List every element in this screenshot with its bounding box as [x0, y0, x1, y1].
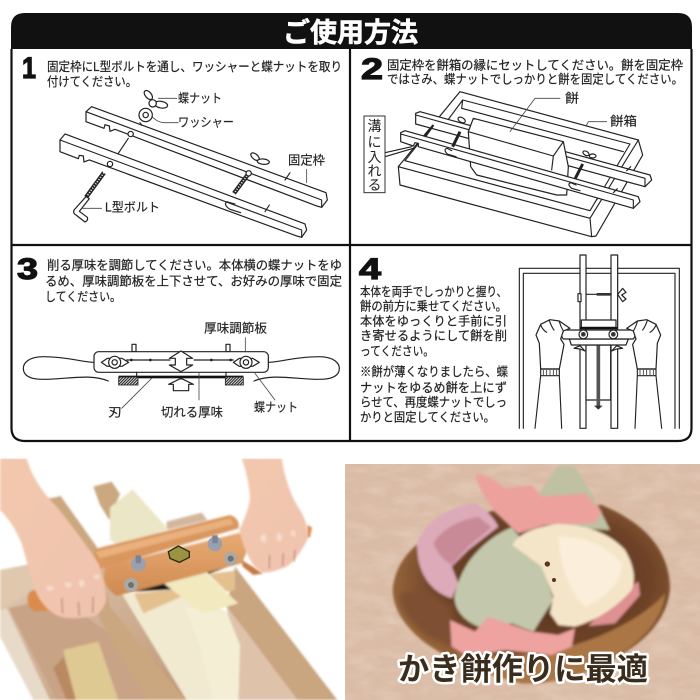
labels: step 1 parts [105, 90, 325, 214]
step 4 instructions: 本体をゆっくりと手前に引 [360, 314, 507, 328]
paper background [345, 464, 700, 700]
step 3 instructions [45, 258, 342, 304]
pink piece top [476, 474, 602, 533]
step 4 note: ナットをゆるめ餅を上にず [360, 381, 507, 395]
cream piece [512, 524, 634, 627]
callout: insert in groove [368, 118, 382, 193]
guide block [134, 589, 182, 613]
step 4 instructions [360, 284, 507, 358]
step 3 instructions: るめ、厚味調節板を上下させて、お好みの厚味で固定 [45, 274, 342, 288]
wooden handle bar [94, 515, 239, 569]
step 4 note: かりと固定してください。 [360, 410, 495, 424]
panel frame [12, 49, 692, 441]
step 4 note [360, 364, 508, 424]
step 3 [17, 253, 342, 420]
step 4 instructions: 本体を両手でしっかりと握り、 [360, 284, 507, 299]
labels: mochi and box: 餅 [565, 92, 579, 106]
callout: insert in groove: れ [368, 163, 382, 179]
step 1 number: 1 [22, 52, 36, 85]
photo: kakimochi in a wooden bowl [345, 464, 700, 700]
step 4 number: 4 [359, 253, 381, 286]
labels: step 3 parts: 切れる厚味 [161, 406, 223, 420]
labels: step 3 parts [108, 320, 298, 420]
cut mochi slice on tray [53, 657, 76, 700]
left knob [27, 590, 53, 612]
tray left rim [0, 608, 50, 700]
labels: mochi and box [565, 92, 637, 128]
caption: かき餅作りに最適 [398, 652, 648, 687]
left hand and arm [0, 458, 106, 618]
pink piece bottom [450, 617, 575, 657]
step 4 instructions: 餅の前方に乗せてください。 [360, 298, 507, 314]
tray right [227, 567, 337, 700]
step 2 [361, 53, 683, 237]
step 3 instructions: してください。 [45, 290, 121, 304]
callout: insert in groove: に [368, 134, 382, 150]
step 1 instructions [47, 59, 342, 89]
right hand and arm [239, 458, 308, 573]
labels: step 1 parts: 蝶ナット [178, 90, 222, 106]
logo and bolts [124, 535, 237, 592]
step 4 instructions: き寄せるようにして餅を削 [360, 329, 507, 343]
header bar [11, 13, 692, 49]
step 2 number: 2 [361, 53, 383, 86]
callout: insert in groove: る [368, 177, 382, 193]
labels: step 3 parts: 厚味調節板 [204, 320, 267, 336]
labels: step 1 parts: L型ボルト [105, 200, 160, 214]
diagram: frame on mochi box [364, 92, 652, 237]
pink piece right [588, 582, 640, 626]
step 4 [359, 253, 679, 428]
photo: shaving mochi with the tool [0, 458, 337, 700]
callout: insert in groove: 入 [368, 149, 382, 165]
step 4 note: ※餅が薄くなりましたら、蝶 [360, 364, 508, 379]
tray floor [0, 566, 188, 700]
step 3 instructions: 削る厚味を調節してください。本体横の蝶ナットをゆ [47, 258, 342, 272]
green piece at back [538, 465, 610, 530]
pink curled piece left [417, 503, 498, 598]
diagram: fixing frames and bolts [60, 89, 327, 237]
title: ご使用方法 [283, 17, 418, 48]
step 2 instructions: 固定枠を餅箱の縁にセットしてください。餅を固定枠 [387, 58, 683, 72]
step 4 instructions: ってください。 [360, 344, 434, 358]
wooden bowl [393, 504, 670, 683]
step 3 number: 3 [17, 253, 38, 286]
callout: insert in groove: 溝 [368, 118, 382, 134]
step 2 instructions [387, 58, 683, 86]
labels: step 1 parts: 固定枠 [288, 154, 325, 168]
green piece [454, 527, 553, 632]
diagram: hands pulling the tool [519, 255, 679, 428]
back rail [93, 482, 120, 520]
labels: step 3 parts: 蝶ナット [254, 400, 298, 414]
diagram: thickness adjustment [23, 338, 339, 408]
labels: step 3 parts: 刃 [108, 406, 122, 420]
step 1 instructions: 固定枠にL型ボルトを通し、ワッシャーと蝶ナットを取り [47, 59, 342, 74]
instruction panel [11, 13, 692, 441]
labels: step 1 parts: ワッシャー [178, 116, 234, 130]
step 4 note: らせて、再度蝶ナットでしっ [360, 394, 507, 410]
dark specks on cream piece [545, 561, 556, 582]
labels: mochi and box: 餅箱 [610, 114, 637, 128]
mochi block [110, 489, 168, 547]
mochi slice [163, 572, 238, 614]
step 1 instructions: 付けてください。 [47, 75, 137, 89]
step 1 [22, 52, 342, 237]
